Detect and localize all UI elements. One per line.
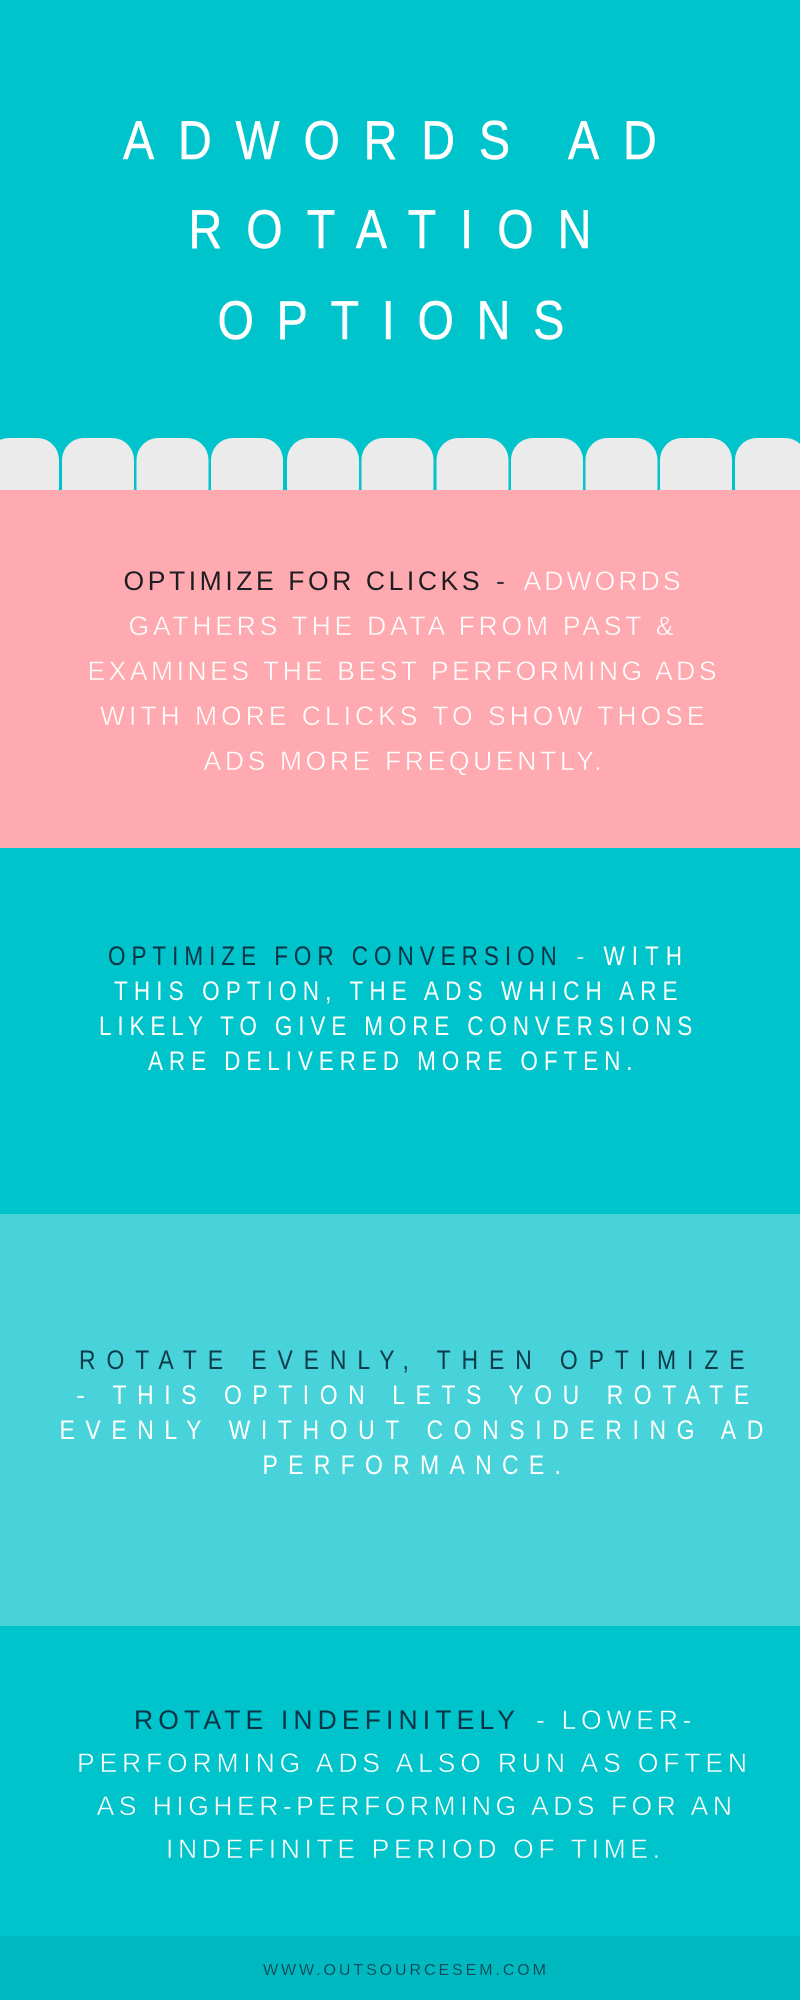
text block: rotate evenly: PERFORMANCE. bbox=[262, 1450, 561, 1480]
text block: rotate indefinitely: INDEFINITE PERIOD OF TIME. bbox=[166, 1834, 660, 1864]
text block: optimize for conversion: THIS OPTION, THE ADS WHICH ARE bbox=[114, 977, 678, 1006]
title: ROTATION bbox=[188, 198, 591, 260]
title bbox=[123, 109, 657, 351]
text block: optimize for clicks: WITH MORE CLICKS TO SHOW THOSE bbox=[100, 701, 704, 731]
text block: optimize for clicks bbox=[88, 566, 716, 776]
panel: optimize for clicks bbox=[0, 490, 800, 848]
text block: rotate indefinitely: ROTATE INDEFINITELY bbox=[134, 1705, 515, 1735]
text block: optimize for clicks: - bbox=[496, 566, 505, 596]
footer bar bbox=[0, 1936, 800, 2000]
text block: optimize for clicks: OPTIMIZE FOR CLICKS bbox=[124, 566, 480, 596]
text block: optimize for conversion: ARE DELIVERED MORE OFTEN. bbox=[148, 1047, 632, 1076]
panel: header bbox=[0, 0, 800, 510]
text block: rotate indefinitely: PERFORMING ADS ALSO RUN AS OFTEN bbox=[77, 1748, 747, 1778]
teeth row decoration bbox=[0, 438, 800, 510]
text block: optimize for clicks: ADS MORE FREQUENTLY. bbox=[204, 746, 602, 776]
text block: optimize for clicks: GATHERS THE DATA FROM PAST & bbox=[128, 611, 674, 641]
title: OPTIONS bbox=[218, 289, 564, 351]
text block: rotate evenly: ROTATE EVENLY, THEN OPTIMIZE bbox=[79, 1345, 745, 1375]
panel: optimize for conversion bbox=[0, 848, 800, 1214]
text block: optimize for conversion: LIKELY TO GIVE MORE CONVERSIONS bbox=[99, 1012, 692, 1041]
title: ADWORDS AD bbox=[123, 109, 657, 171]
footer url: WWW.OUTSOURCESEM.COM bbox=[263, 1962, 546, 1979]
text block: rotate indefinitely bbox=[77, 1705, 747, 1864]
text block: rotate evenly: THIS OPTION LETS YOU ROTATE bbox=[112, 1380, 749, 1410]
text block: optimize for conversion: - bbox=[576, 941, 585, 971]
panel: rotate evenly bbox=[0, 1214, 800, 1626]
text block: rotate indefinitely: - bbox=[536, 1705, 545, 1735]
text block: rotate evenly bbox=[60, 1345, 763, 1480]
text block: rotate indefinitely: LOWER- bbox=[562, 1705, 692, 1735]
text block: optimize for conversion bbox=[99, 941, 692, 1076]
text block: optimize for conversion: WITH bbox=[604, 942, 682, 971]
text block: optimize for clicks: EXAMINES THE BEST PERFORMING ADS bbox=[88, 656, 716, 686]
text block: rotate indefinitely: AS HIGHER-PERFORMING ADS FOR AN bbox=[97, 1791, 732, 1821]
text block: optimize for conversion: OPTIMIZE FOR CONVERSION bbox=[108, 942, 557, 971]
text block: rotate evenly: - bbox=[76, 1380, 85, 1410]
text block: optimize for clicks: ADWORDS bbox=[524, 566, 680, 596]
panel: rotate indefinitely bbox=[0, 1626, 800, 1936]
text block: rotate evenly: EVENLY WITHOUT CONSIDERING AD bbox=[60, 1415, 763, 1445]
